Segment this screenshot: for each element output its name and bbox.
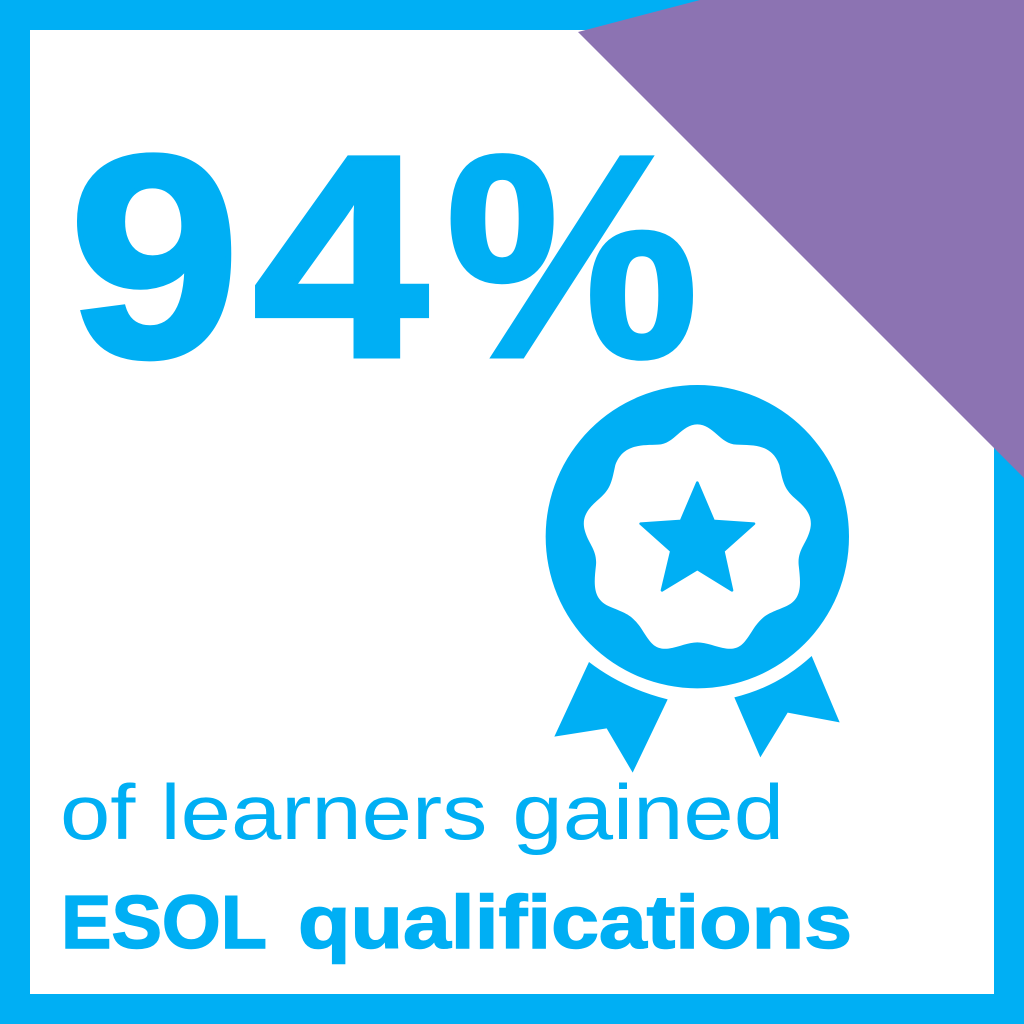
- caption line 2: [61, 880, 852, 964]
- wavy white seal: [584, 424, 811, 649]
- caption line 2: ESOL: [61, 880, 267, 964]
- right ribbon tail: [734, 656, 840, 757]
- rosette disc: [546, 385, 849, 688]
- headline statistic: 94%: 9: [69, 96, 240, 418]
- headline statistic: 94%: %: [446, 96, 698, 418]
- caption line 2: qualifications: [298, 880, 852, 964]
- caption line 1: of learners gained: [60, 768, 784, 856]
- headline statistic: 94%: 4: [253, 96, 430, 418]
- headline statistic: 94%: [69, 96, 698, 418]
- star: [641, 483, 754, 590]
- icon: award rosette with star: [546, 385, 849, 773]
- left ribbon tail: [554, 662, 668, 773]
- purple corner triangle: [578, 0, 1024, 478]
